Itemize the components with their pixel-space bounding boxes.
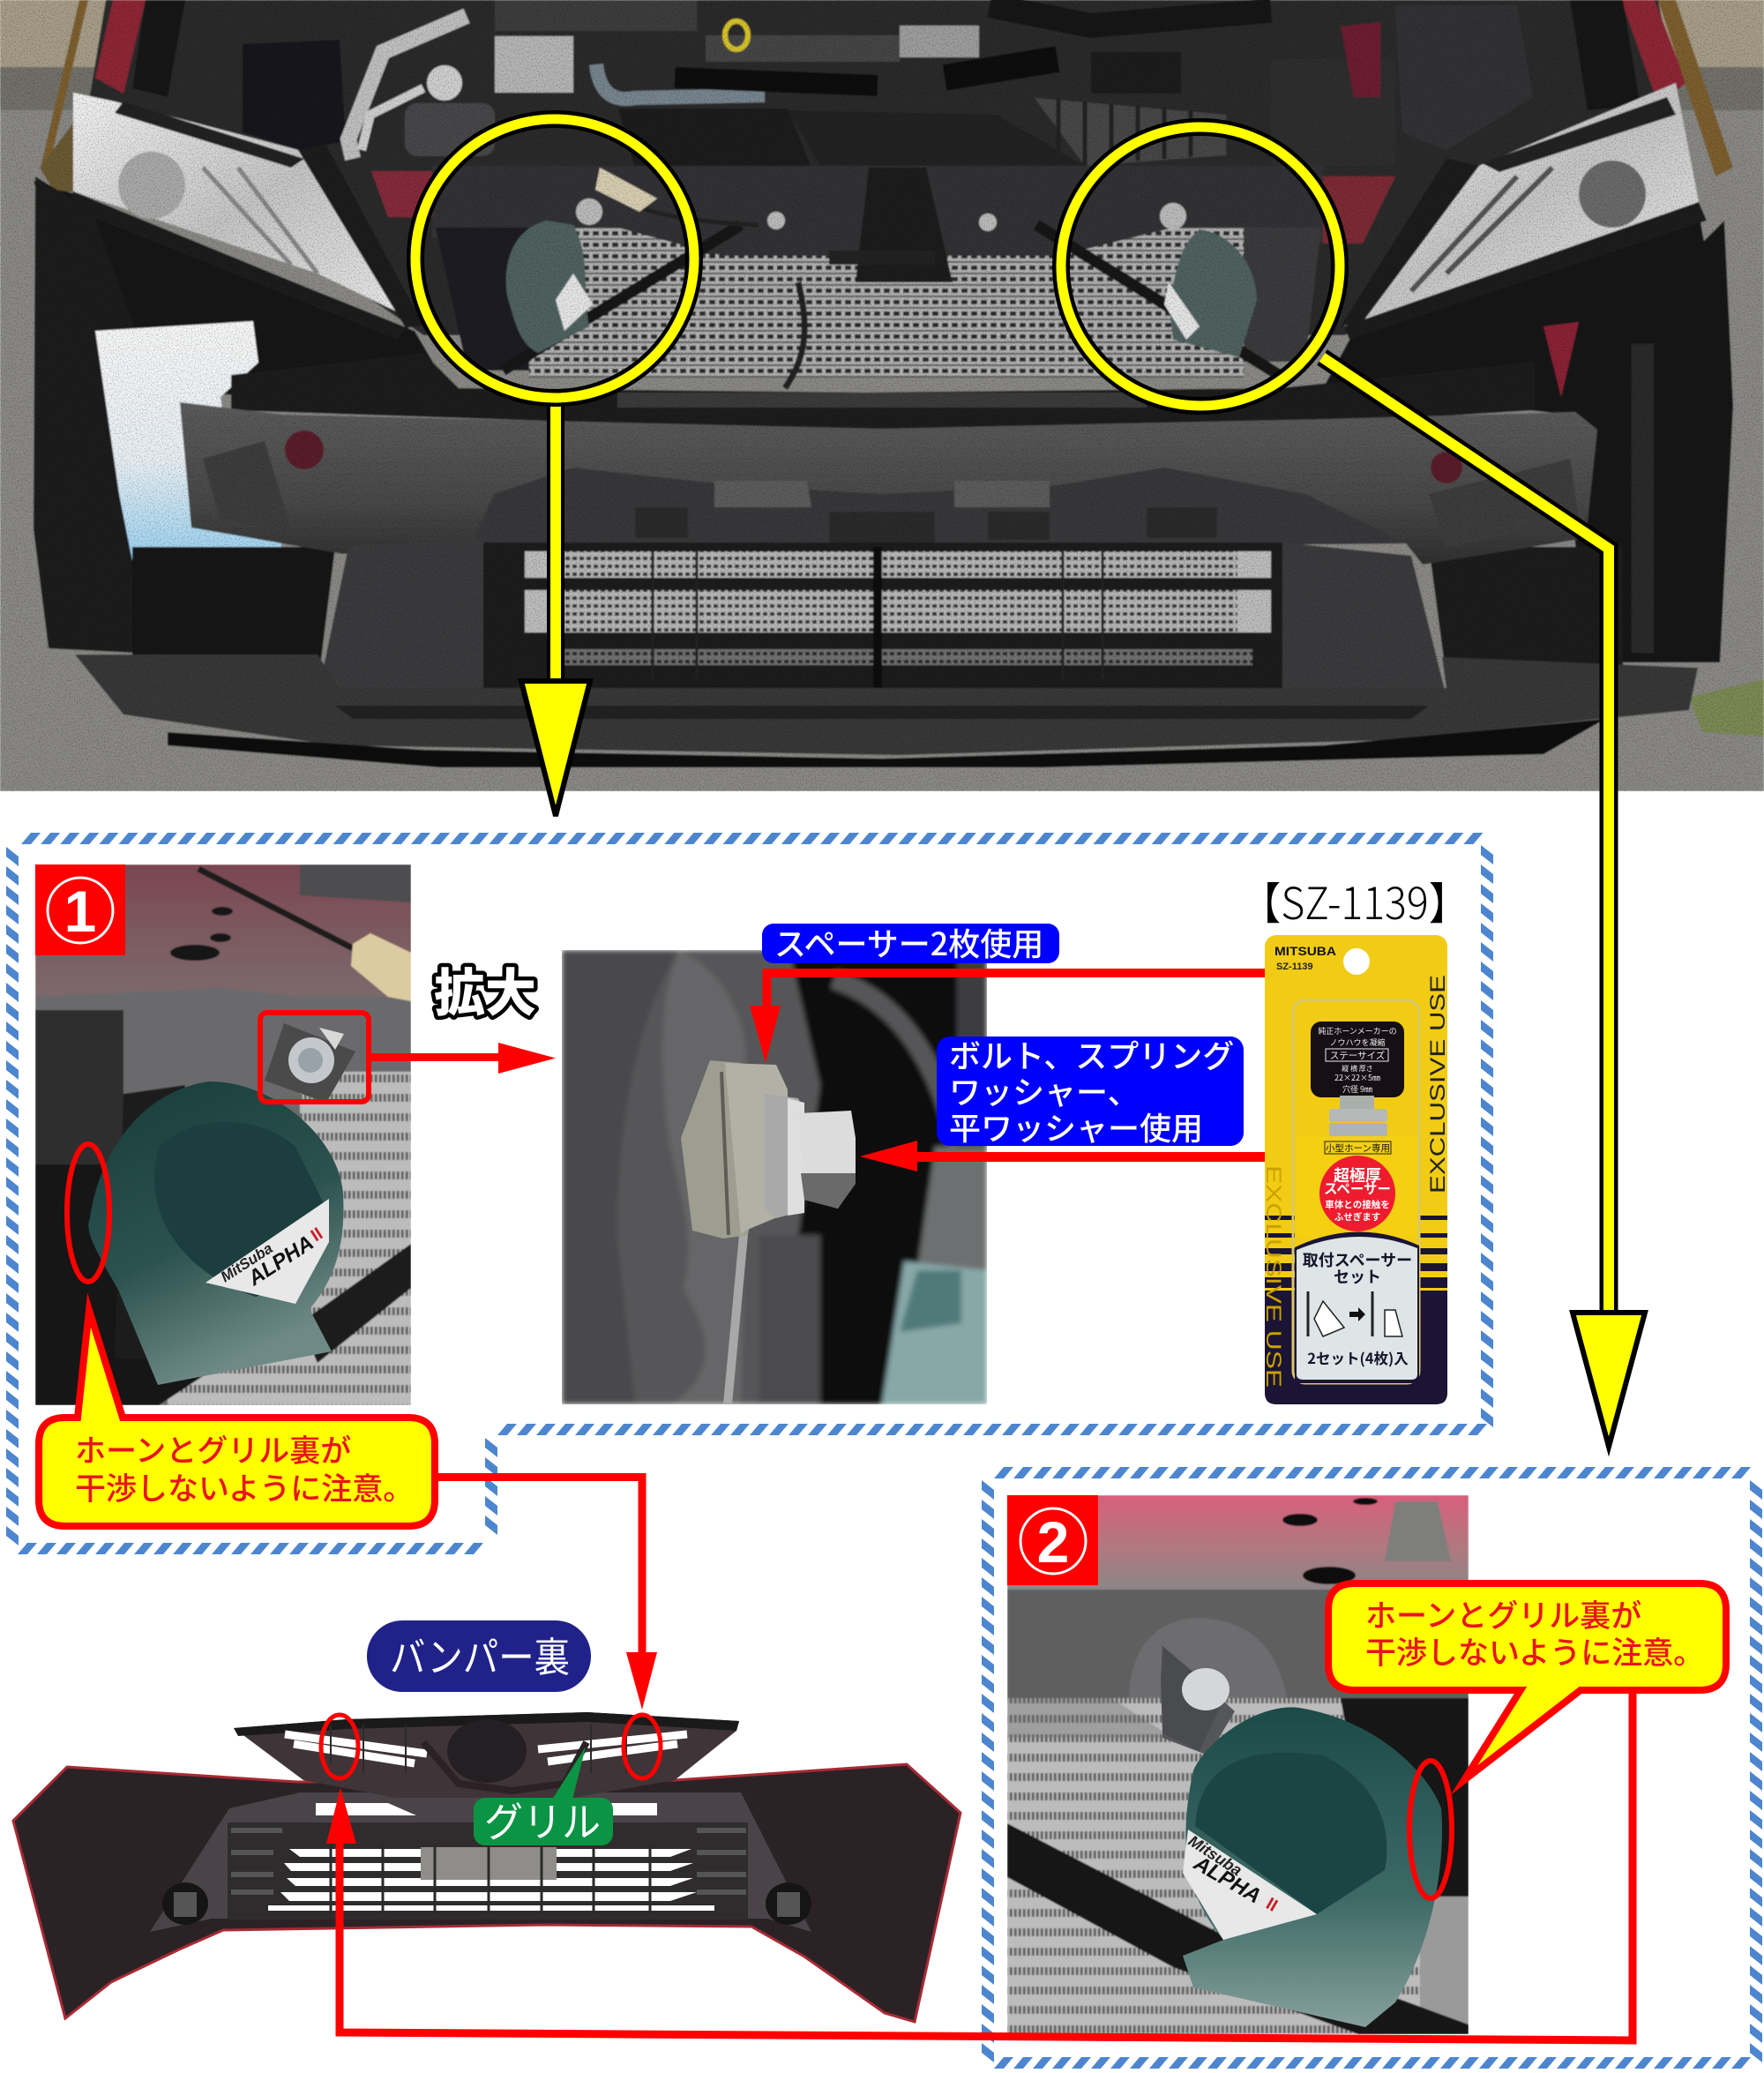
photo: front of car with bumper removed: [0, 0, 1764, 791]
headlights: [40, 97, 93, 194]
product package SZ-1139: SZ-1139: [1276, 962, 1313, 972]
lower grille: [228, 1822, 748, 1920]
red ellipse on horn 1: [67, 1144, 109, 1282]
photo: horn detail 1: MitSuba: [218, 1239, 276, 1285]
cross member and dark sides: [432, 166, 1323, 256]
black info label: 純正ホーンメーカーの: [1318, 1025, 1397, 1036]
product package SZ-1139: 小型ホーン専用: [1326, 1141, 1390, 1155]
photo: horn detail 1: [35, 864, 411, 1405]
badge 1: 1: [64, 879, 96, 944]
mid openings: [316, 1803, 657, 1815]
foam absorber: [180, 402, 1597, 565]
instruction card: [1295, 1231, 1419, 1383]
fog lamps: [162, 1882, 811, 1925]
label: bolt, spring washer, flat washer: [937, 1031, 1244, 1149]
grille label: グリル: [484, 1791, 601, 1849]
photo: horn detail 2: ALPHA: [1189, 1851, 1265, 1909]
steel plate: [723, 1085, 769, 1404]
product package SZ-1139: EXCLUSIVE USE: [1426, 975, 1450, 1194]
callout 1: 干渉しないように注意。: [75, 1464, 414, 1509]
arrow: bolt callout: [860, 1141, 1266, 1171]
instruction card: 2セット(4枚)入: [1307, 1347, 1409, 1368]
side stripes: [1265, 1216, 1447, 1288]
horn body: [88, 1081, 343, 1385]
yellow arrow: left horn to panel 1: [521, 401, 590, 816]
spacers, washers and bolt: [681, 1060, 856, 1239]
badge 2: [1007, 1495, 1098, 1585]
bracket and bolt: [1161, 1646, 1235, 1755]
label: bolt, spring washer, flat washer: ボルト、スプリング: [949, 1031, 1234, 1077]
black info label: 22×22×5㎜: [1334, 1072, 1380, 1083]
highlight box on bracket: [260, 1013, 369, 1102]
product package SZ-1139: [1261, 935, 1450, 1404]
yellow arrow: right horn to panel 2: [1322, 357, 1645, 1447]
dark below lights: [34, 181, 459, 406]
photo: enlarged bolt and spacers: [562, 950, 987, 1404]
engine bay: [88, 0, 1698, 335]
label: bolt, spring washer, flat washer: 平ワッシャー使用: [949, 1104, 1203, 1149]
red seal: ふせぎます: [1334, 1210, 1380, 1224]
black info label: 穴径 9㎜: [1342, 1083, 1372, 1095]
photo: horn detail 1: II: [308, 1224, 326, 1246]
label: two spacers used: スペーサー2枚使用: [774, 919, 1043, 965]
lower radiator: [483, 543, 1282, 697]
red seal: 超極厚: [1334, 1164, 1381, 1186]
lower frame: [75, 655, 1698, 755]
red seal: 車体との接触を: [1325, 1198, 1390, 1211]
black info label: 縦 横 厚さ: [1342, 1064, 1373, 1074]
red connector: callout 1 to grille: [438, 1477, 642, 1658]
red ellipse on grille right: [624, 1715, 661, 1778]
photo: horn detail 2: Mitsuba: [1185, 1832, 1245, 1879]
badge 2: 2: [1037, 1509, 1069, 1575]
callout 2: ホーンとグリル裏が: [1365, 1591, 1641, 1636]
red connector: callout 2 to grille: [340, 1694, 1633, 2040]
photo: horn detail 1: ALPHA: [243, 1231, 318, 1291]
instruction card: 取付スペーサー: [1303, 1248, 1412, 1271]
arrowhead: to grille right: [626, 1652, 657, 1710]
arrowhead: to grille left: [326, 1788, 356, 1844]
callout 1: ホーンとグリル裏が: [75, 1426, 351, 1471]
panel frame 2: blue hatched border: [982, 1467, 1762, 2069]
instruction card: セット: [1334, 1265, 1381, 1288]
label: bolt, spring washer, flat washer: ワッシャー、: [949, 1067, 1140, 1113]
spacer sample: [1329, 1096, 1387, 1136]
grille pointer: [552, 1747, 586, 1800]
washer tank: [95, 321, 281, 574]
black info label: ステーサイズ: [1330, 1049, 1385, 1062]
photo: horn detail 2: [1007, 1495, 1469, 2034]
yellow ring: left horn: [415, 119, 694, 398]
black info label: ノウハウを凝縮: [1329, 1036, 1386, 1048]
badge 1: [35, 864, 125, 955]
horn body: [1183, 1707, 1442, 2027]
panel frame 1: blue hatched border: [6, 833, 1493, 1554]
product package SZ-1139: EXCLUSIVE USE: [1261, 1165, 1285, 1388]
callout 2: 干渉しないように注意。: [1365, 1628, 1704, 1673]
red ellipse on grille left: [321, 1715, 358, 1778]
photo: rear of bumper and grille: [13, 1712, 960, 2022]
callout 1: [39, 1310, 435, 1526]
arrow: spacer callout line: [767, 973, 1266, 1010]
dark fenders: [34, 176, 135, 653]
upper grille openings: [285, 1734, 687, 1763]
red seal: [1319, 1156, 1395, 1231]
horns in photo: [506, 221, 589, 353]
arrow: bracket to enlargement: [370, 1043, 556, 1074]
red body panels: [371, 171, 450, 217]
red seal: スペーサー: [1324, 1179, 1391, 1198]
enlargement label: 拡大: [434, 952, 536, 1026]
bumper label: バンパー裏: [390, 1626, 570, 1684]
upper bar: [231, 353, 1535, 432]
product package SZ-1139: MITSUBA: [1274, 944, 1336, 958]
yellow ring: right horn: [1061, 127, 1340, 406]
callout 2: [1328, 1583, 1726, 1780]
arrowhead: spacer: [750, 1006, 781, 1063]
red ellipse on horn 2: [1409, 1761, 1452, 1898]
lower dark sides: [132, 547, 335, 688]
bracket and bolt: [265, 1023, 355, 1103]
black info label: [1311, 1022, 1404, 1097]
radiator mesh: [529, 228, 1244, 378]
photo: horn detail 2: II: [1263, 1894, 1281, 1916]
part number: 【SZ-1139】: [1240, 869, 1469, 932]
